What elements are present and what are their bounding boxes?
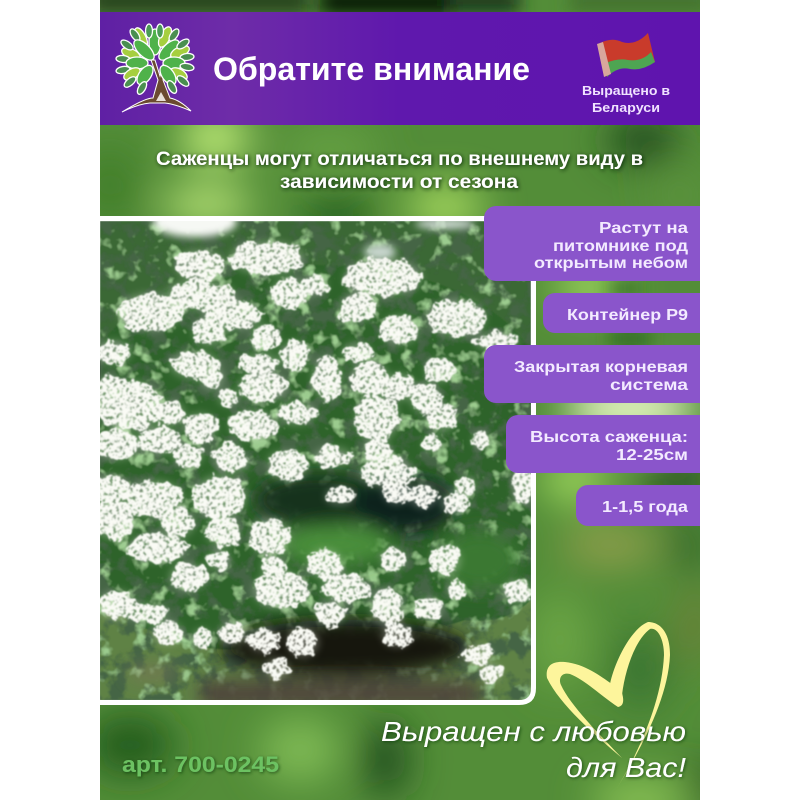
pill: container: Контейнер Р9	[567, 307, 688, 324]
photo background trees and sky	[96, 207, 531, 700]
purple header bar	[100, 12, 700, 125]
icon: yellow heart	[547, 622, 670, 788]
pill: closed root system: система	[610, 377, 688, 394]
shrub foliage	[100, 264, 531, 650]
pill: seedling height	[506, 415, 700, 473]
title: Обратите внимание	[213, 51, 530, 87]
made in Belarus label: Выращено в	[582, 83, 670, 98]
pill: grown outdoors: Растут на	[599, 220, 688, 237]
slogan: для Вас!	[566, 752, 686, 783]
notice text	[156, 149, 643, 193]
pill: age: 1-1,5 года	[602, 499, 688, 516]
made in Belarus label: Беларуси	[592, 100, 660, 115]
slogan: Выращен с любовью	[381, 716, 686, 747]
logo: tree	[115, 24, 195, 112]
pill: grown outdoors: питомнике под	[553, 238, 688, 255]
pill: seedling height: 12-25см	[616, 447, 688, 464]
notice text: Саженцы могут отличаться по внешнему виду в	[156, 149, 643, 170]
notice text: зависимости от сезона	[280, 172, 518, 193]
pill: grown outdoors: открытым небом	[534, 255, 688, 272]
pill: closed root system	[484, 345, 700, 403]
grass	[100, 600, 531, 700]
ground and foliage shading	[130, 474, 520, 708]
feature pills	[484, 206, 700, 526]
icon: Belarus flag	[597, 33, 655, 77]
pill: container	[543, 293, 700, 333]
flower glow under clusters	[91, 241, 533, 682]
slogan	[381, 716, 686, 783]
pill: grown outdoors	[484, 206, 700, 281]
flower clusters	[91, 241, 533, 682]
pill: closed root system: Закрытая корневая	[514, 359, 688, 376]
plant photo with white frame	[91, 207, 536, 708]
pill: seedling height: Высота саженца:	[530, 429, 688, 446]
made in Belarus label	[582, 83, 670, 115]
pill: age	[576, 485, 700, 526]
article number: арт. 700-0245	[122, 752, 279, 777]
